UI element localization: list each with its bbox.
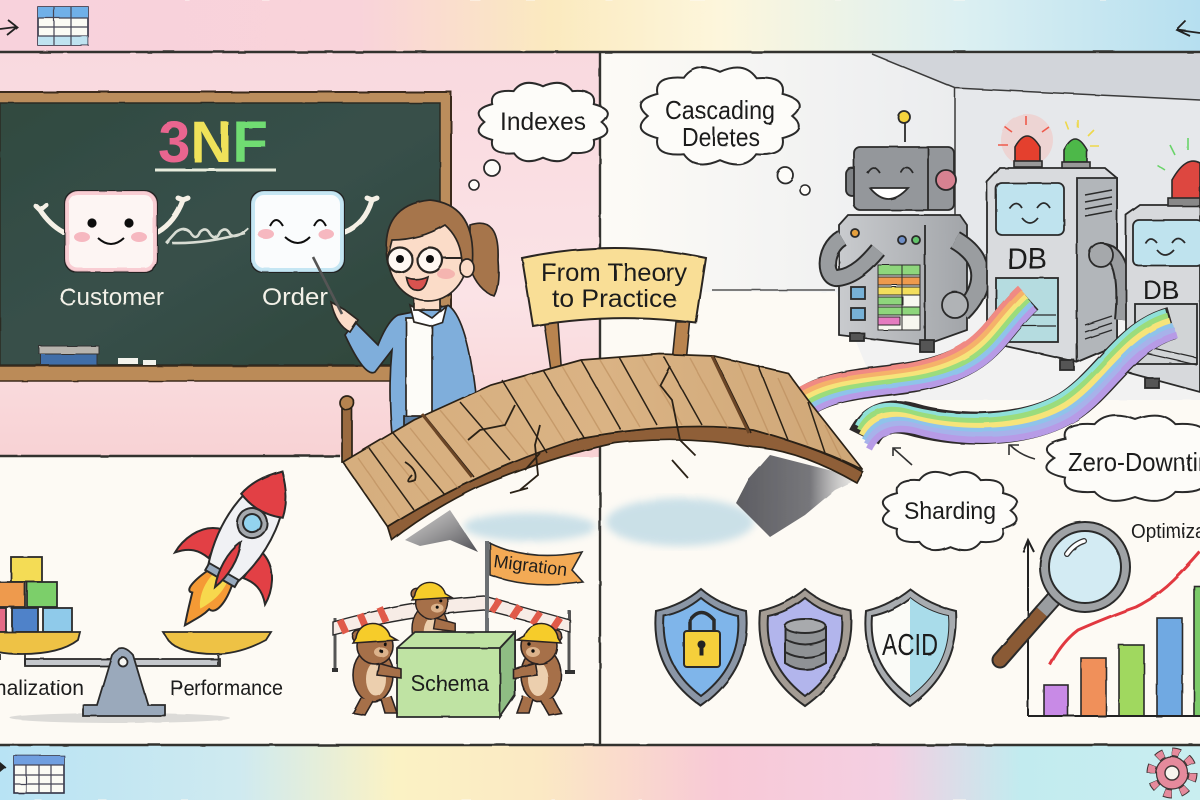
label: Order: Order (262, 284, 328, 311)
plank grain (358, 357, 842, 518)
rock: right abutment (736, 455, 860, 537)
bar 3 (1119, 645, 1144, 716)
shield: database (759, 589, 851, 706)
panel: lower right floor (600, 290, 1200, 745)
teacher character (313, 200, 498, 446)
bear: right (513, 623, 562, 715)
icon: bottom table (14, 756, 64, 793)
thought cloud: Sharding: Sharding (904, 498, 996, 525)
robot (828, 111, 980, 352)
chalkboard (0, 92, 451, 381)
plank dividers (369, 357, 825, 510)
panel: server room (600, 52, 1200, 400)
icon: bottom left arrow (0, 762, 6, 772)
icon: top right arrow (1177, 21, 1200, 36)
database server 1: DB (1007, 241, 1047, 276)
chart: optimization bars (1023, 521, 1200, 716)
chalk pieces (118, 358, 156, 365)
thought cloud: Cascading Deletes: Deletes (682, 122, 760, 152)
schema cube: Schema (411, 671, 490, 696)
schema cube (397, 632, 515, 717)
panel: classroom wall (0, 52, 600, 457)
migration flag (487, 541, 583, 632)
panel: top colour band (0, 0, 1200, 52)
panel: bottom colour band (0, 745, 1200, 800)
water smudges (464, 498, 754, 546)
bar 5 (1194, 586, 1200, 716)
shield: ACID (865, 589, 956, 706)
rainbow ribbon: first stream (790, 288, 1035, 417)
bear: top (411, 582, 455, 665)
database server 1 (987, 168, 1117, 370)
red and green beacon on server 2 (1157, 138, 1200, 206)
chalk link (166, 228, 248, 243)
icon: top left arrow (0, 20, 17, 35)
eraser (39, 346, 99, 365)
balance beam (25, 659, 220, 666)
construction barrier (332, 596, 575, 672)
pointer stick (313, 257, 342, 314)
right pan (163, 632, 271, 654)
shield: padlock (655, 589, 747, 706)
magnifying glass (1000, 522, 1130, 660)
thought cloud: Sharding (883, 472, 1017, 550)
left pan with blocks (0, 557, 80, 654)
panel: lower left floor (0, 457, 600, 745)
heading: 3NF: 3NF (158, 110, 268, 175)
shield: ACID: ACID (882, 627, 938, 662)
cracks (405, 366, 695, 493)
fulcrum (83, 648, 165, 716)
rocket (146, 445, 327, 655)
thought cloud: Indexes: Indexes (500, 108, 586, 136)
sign: From Theory to Practice: From Theory (541, 259, 687, 287)
bar 4 (1157, 618, 1182, 716)
sign posts (544, 322, 690, 378)
bridge deck (343, 354, 863, 527)
table character: Order (251, 191, 377, 311)
thought cloud: Cascading Deletes (641, 68, 810, 195)
database server 2: DB (1143, 275, 1179, 305)
rainbow ribbon: second stream (858, 312, 1177, 449)
red alarm light (998, 114, 1053, 167)
bridge beam (388, 426, 863, 540)
table character: Customer (36, 191, 188, 311)
thought cloud: Zero-Downtime (1046, 415, 1200, 501)
thought cloud: Indexes (469, 83, 607, 190)
bridge post (342, 408, 352, 462)
thought cloud: Cascading Deletes: Cascading (665, 95, 775, 125)
icon: top table (38, 7, 88, 45)
robot chest table (878, 265, 920, 330)
bridge (340, 354, 863, 540)
bear: left (352, 623, 401, 715)
sign: From Theory to Practice (522, 248, 706, 326)
rock: left abutment (405, 510, 478, 552)
green status light (1062, 120, 1099, 168)
bar 2 (1081, 658, 1106, 716)
trend arrow (1050, 552, 1200, 665)
label: Customer: Customer (59, 284, 164, 311)
sign: From Theory to Practice: to Practice (552, 285, 677, 313)
scale: normalization vs performance (0, 557, 283, 723)
database server 2 (1089, 205, 1200, 392)
label: Performance: Performance (170, 677, 283, 700)
small arrows near clouds (893, 445, 1035, 465)
icon: gear (1151, 752, 1193, 794)
bar 1 (1044, 685, 1068, 716)
migration flag: Migration (493, 551, 568, 580)
